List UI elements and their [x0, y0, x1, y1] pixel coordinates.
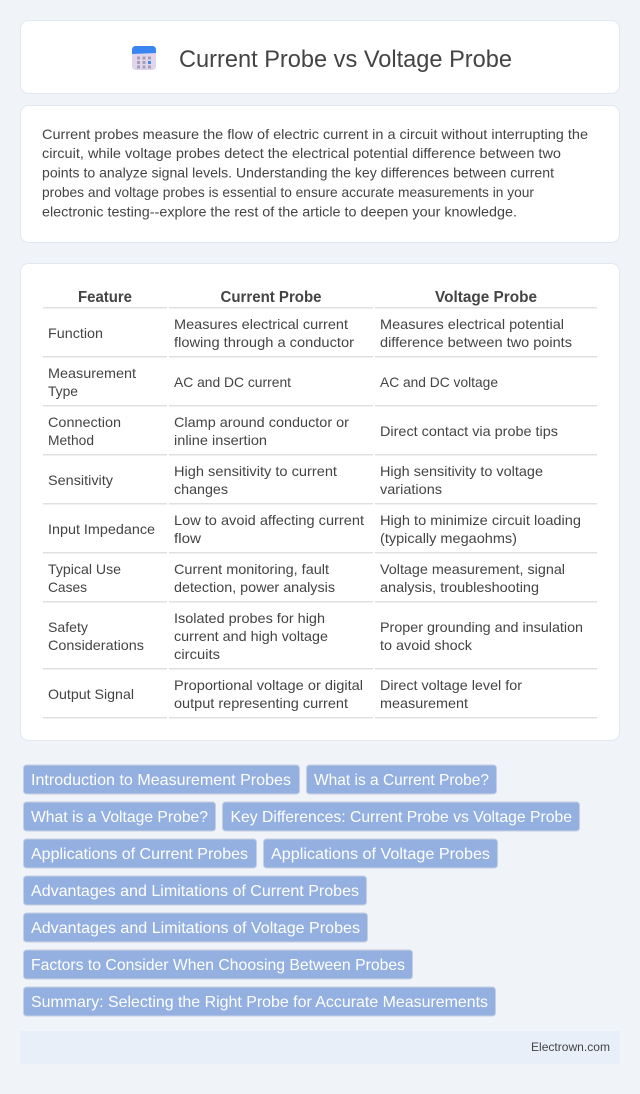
- row: function: difference between two points: [380, 334, 572, 350]
- row: safety considerations: to avoid shock: [380, 637, 473, 653]
- row: function: [48, 316, 572, 350]
- table header row: [78, 289, 537, 306]
- row: sensitivity: [48, 463, 543, 497]
- row: typical use cases: analysis, troubleshooting: [380, 579, 539, 595]
- footer: Electrown.com: [531, 1040, 610, 1054]
- text block: intro paragraph: probes and voltage probes is essential to ensure accurate measurements in your: [42, 184, 534, 200]
- row: output signal: measurement: [380, 695, 468, 711]
- table header row: Current Probe: [220, 289, 322, 306]
- row: measurement type: Measurement: [48, 365, 136, 381]
- row: typical use cases: detection, power analysis: [174, 579, 335, 595]
- tag: introduction: [24, 765, 300, 794]
- tag: what is a current probe: [306, 765, 496, 794]
- tag: what is a voltage probe: What is a Voltage Probe?: [31, 809, 208, 826]
- text block: intro paragraph: circuit, while voltage probes detect the electrical potential difference between two: [42, 145, 561, 161]
- icon: calendar grid: [132, 46, 156, 70]
- row: input impedance: High to minimize circuit loading: [380, 512, 581, 528]
- row: connection method: Clamp around conductor or: [174, 414, 349, 430]
- text block: intro paragraph: points to analyze signal levels. Understanding the key differences between current: [42, 164, 554, 180]
- row: output signal: Direct voltage level for: [380, 677, 522, 693]
- tag: factors to consider: [24, 950, 412, 979]
- tag: advantages of current probes: [24, 876, 366, 905]
- tag: introduction: Introduction to Measurement Probes: [31, 772, 291, 789]
- tag: what is a current probe: What is a Current Probe?: [314, 772, 489, 789]
- panel: introduction text: [20, 106, 620, 242]
- row: safety considerations: [48, 610, 583, 662]
- row: sensitivity: High sensitivity to current: [174, 463, 337, 479]
- text block: intro paragraph: Current probes measure the flow of electric current in a circuit without interrupting the: [42, 126, 588, 142]
- tag: advantages of voltage probes: Advantages and Limitations of Voltage Probes: [31, 920, 360, 937]
- table header row: Voltage Probe: [435, 289, 537, 306]
- row: input impedance: flow: [174, 530, 202, 546]
- row: measurement type: [48, 365, 498, 399]
- panel: comparison table: [20, 264, 620, 740]
- row: connection method: inline insertion: [174, 432, 267, 448]
- row: sensitivity: variations: [380, 481, 442, 497]
- row: input impedance: Low to avoid affecting current: [174, 512, 364, 528]
- tag: applications of voltage probes: [264, 839, 498, 868]
- tag: summary: Summary: Selecting the Right Probe for Accurate Measurements: [31, 994, 488, 1011]
- tag: factors to consider: Factors to Consider When Choosing Between Probes: [31, 957, 405, 974]
- row: input impedance: (typically megaohms): [380, 530, 517, 546]
- row: safety considerations: circuits: [174, 646, 220, 662]
- panel: title header: [20, 20, 620, 94]
- tag: what is a voltage probe: [24, 802, 216, 831]
- row: sensitivity: Sensitivity: [48, 472, 113, 488]
- row: output signal: Output Signal: [48, 686, 134, 702]
- row: output signal: Proportional voltage or digital: [174, 677, 363, 693]
- tag: applications of current probes: [24, 839, 256, 868]
- row: typical use cases: Current monitoring, fault: [174, 561, 329, 577]
- row: safety considerations: Considerations: [48, 637, 144, 653]
- row: sensitivity: High sensitivity to voltage: [380, 463, 543, 479]
- tag: key differences: Key Differences: Current Probe vs Voltage Probe: [230, 809, 572, 826]
- row: typical use cases: [48, 561, 565, 595]
- text block: intro paragraph: electronic testing--explore the rest of the article to deepen your knowledge.: [42, 204, 517, 220]
- row: connection method: Method: [48, 432, 94, 448]
- panel: topic tags: [24, 765, 580, 1016]
- row: output signal: output representing current: [174, 695, 348, 711]
- row: connection method: Connection: [48, 414, 121, 430]
- row: function: Function: [48, 325, 103, 341]
- tag: key differences: [222, 802, 580, 831]
- table header row: Feature: [78, 289, 132, 306]
- row: typical use cases: Voltage measurement, signal: [380, 561, 565, 577]
- row: function: Measures electrical current: [174, 316, 348, 332]
- row: safety considerations: Isolated probes for high: [174, 610, 325, 626]
- row: input impedance: Input Impedance: [48, 521, 155, 537]
- row: measurement type: AC and DC voltage: [380, 374, 498, 390]
- text block: intro paragraph: [42, 126, 588, 220]
- row: sensitivity: changes: [174, 481, 228, 497]
- tag: advantages of voltage probes: [24, 913, 368, 942]
- tag: advantages of current probes: Advantages and Limitations of Current Probes: [31, 883, 359, 900]
- row: typical use cases: Cases: [48, 579, 87, 595]
- row: measurement type: AC and DC current: [174, 374, 291, 390]
- row: connection method: [48, 414, 558, 448]
- row: function: flowing through a conductor: [174, 334, 354, 350]
- tag: applications of voltage probes: Applications of Voltage Probes: [271, 846, 490, 863]
- row: safety considerations: current and high voltage: [174, 628, 328, 644]
- title: Current Probe vs Voltage Probe: [179, 46, 512, 73]
- row: safety considerations: Proper grounding and insulation: [380, 619, 583, 635]
- row: function: Measures electrical potential: [380, 316, 564, 332]
- row: output signal: [48, 677, 522, 711]
- row: safety considerations: Safety: [48, 619, 88, 635]
- footer: [20, 1031, 620, 1064]
- tag: summary: [24, 987, 496, 1016]
- row: typical use cases: Typical Use: [48, 561, 121, 577]
- row: measurement type: Type: [48, 383, 78, 399]
- row: input impedance: [48, 512, 581, 546]
- tag: applications of current probes: Applications of Current Probes: [31, 846, 248, 863]
- row: connection method: Direct contact via probe tips: [380, 423, 558, 439]
